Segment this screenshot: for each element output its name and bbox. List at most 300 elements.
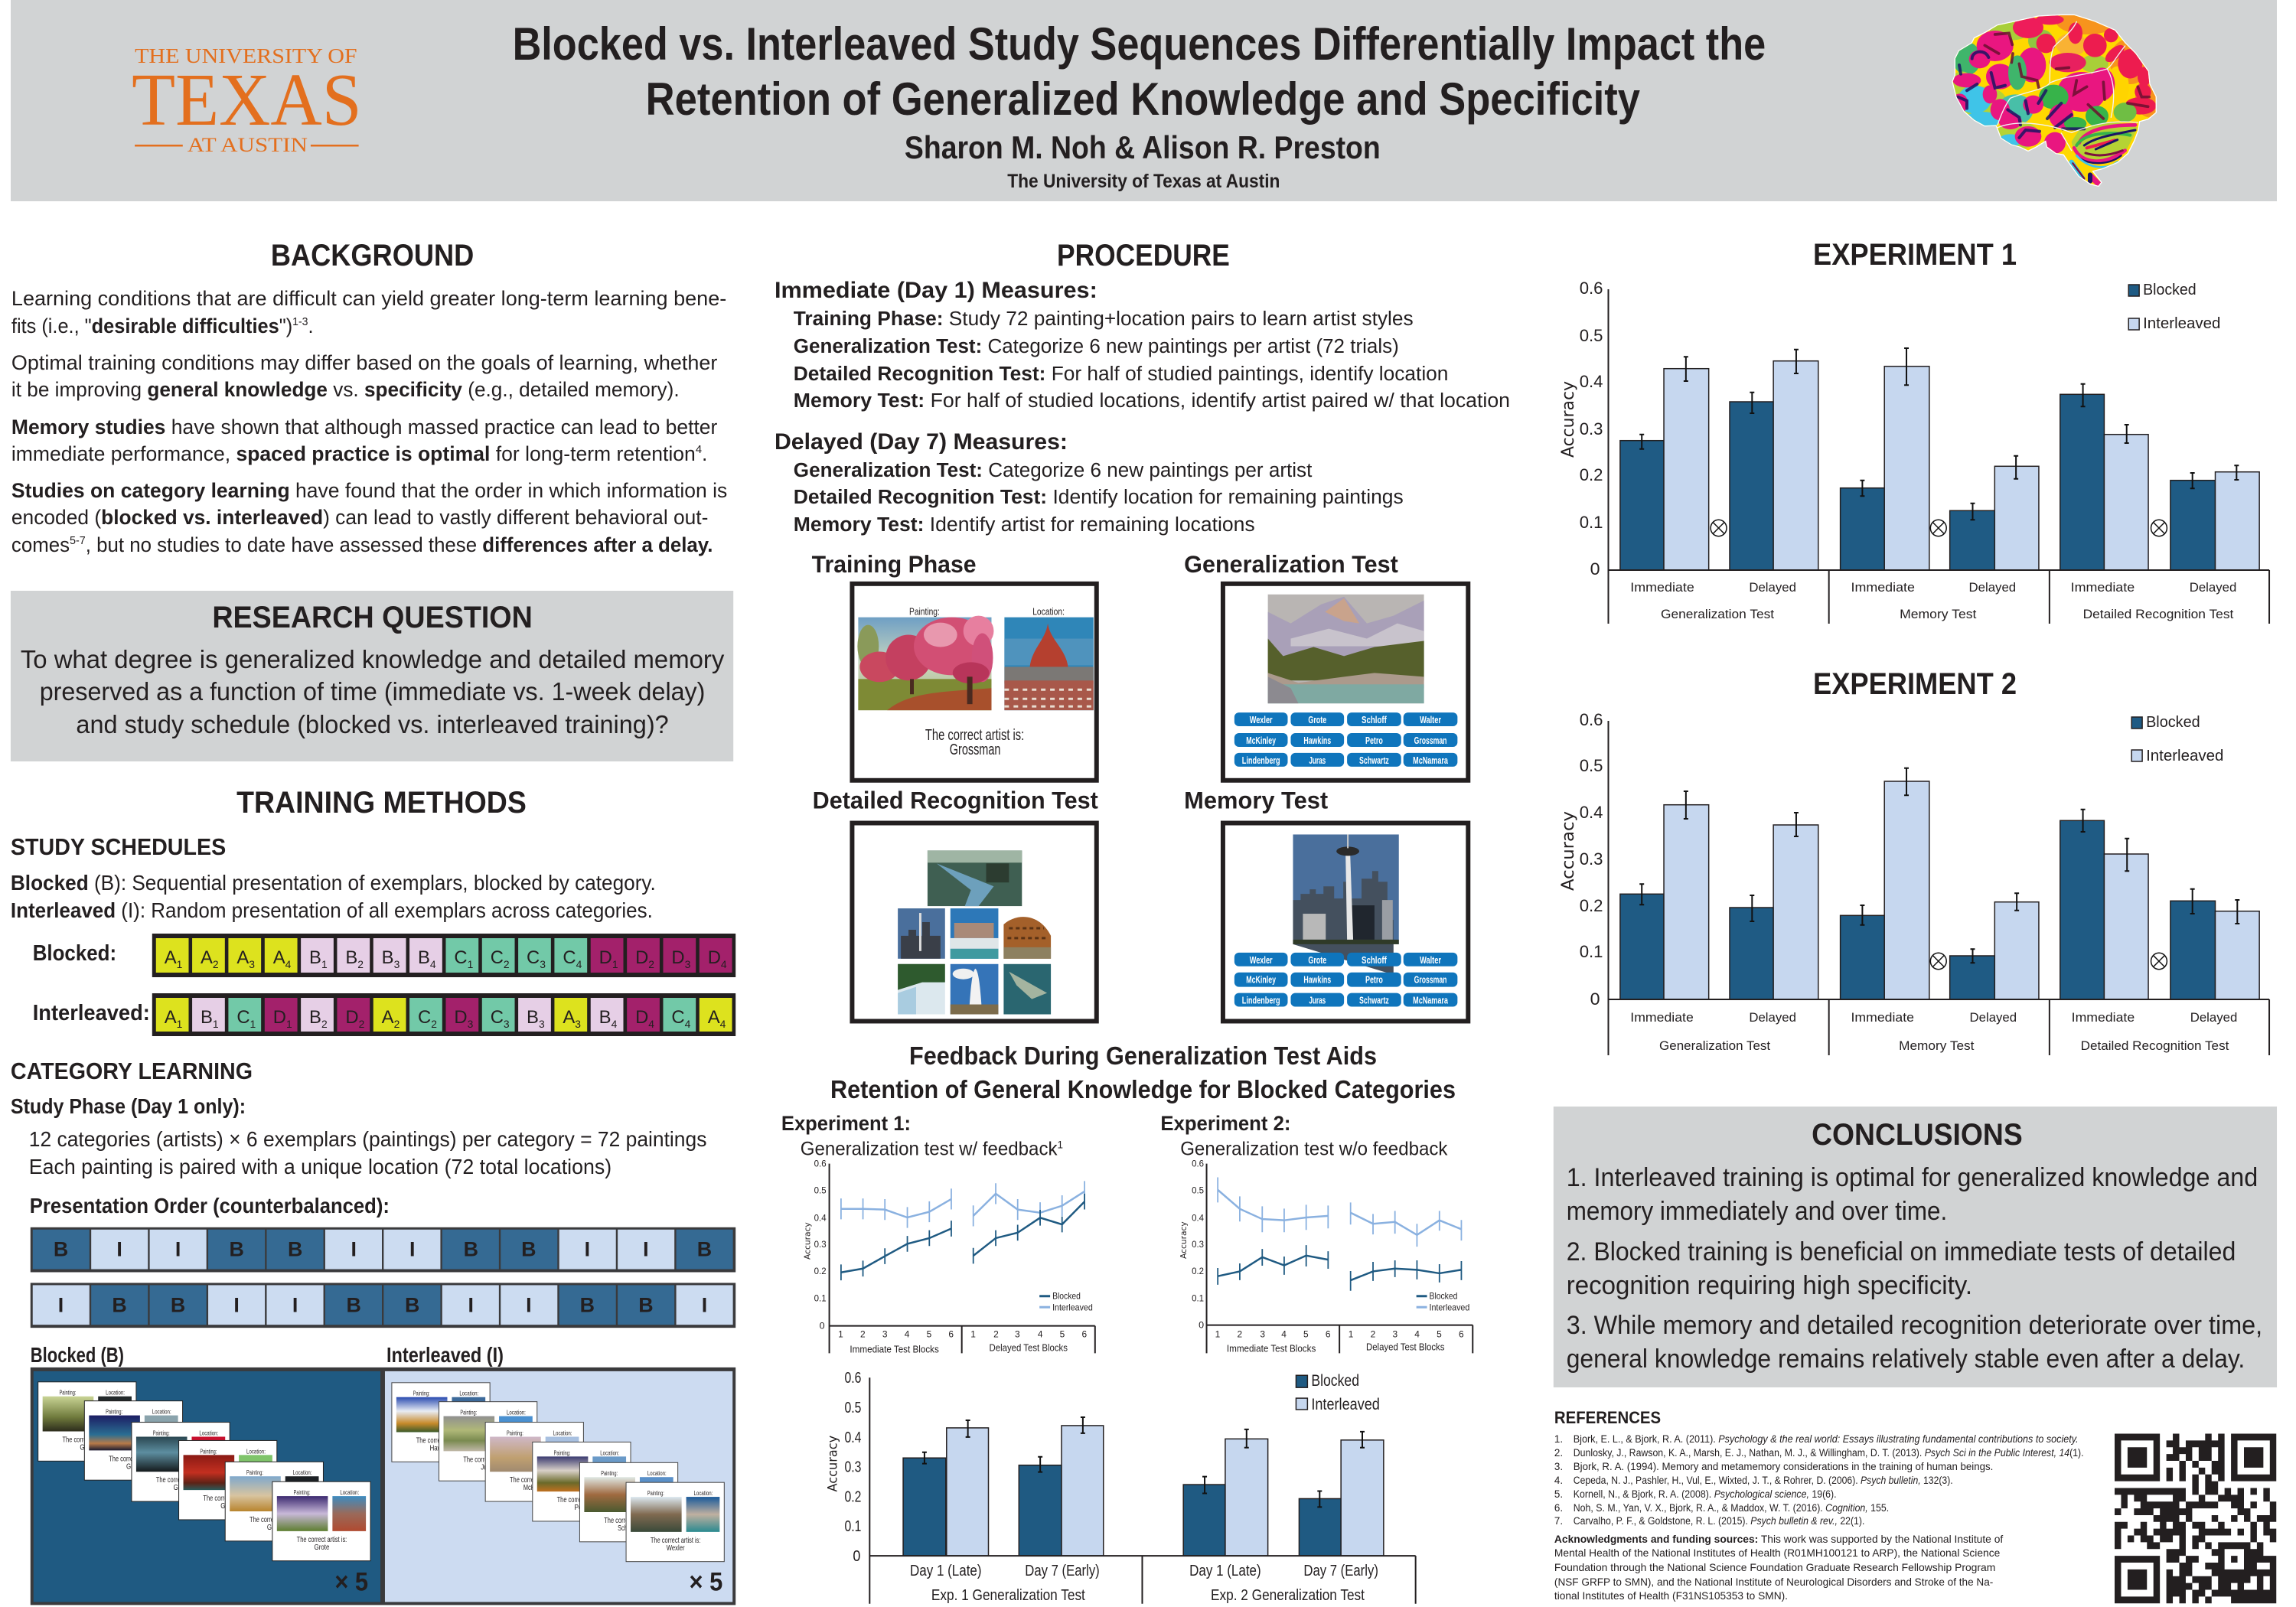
card 5: The correct artist is: bbox=[604, 1517, 654, 1525]
presentation order strip 1: I bbox=[409, 1238, 415, 1261]
line chart: experiment 1 generalization by block: 0.4 bbox=[814, 1212, 827, 1223]
presentation order strip 1 bbox=[31, 1227, 735, 1273]
text block: delayed measures: Delayed (Day 7) Measures: bbox=[775, 429, 1068, 455]
artist response buttons: Walter bbox=[1420, 954, 1441, 966]
reference list: 5. bbox=[1554, 1488, 1563, 1500]
heading: feedback finding: Retention of General Knowledge for Blocked Categories bbox=[830, 1075, 1456, 1103]
interleaved sequence strip: 2 bbox=[321, 1018, 328, 1030]
bar chart: experiment 2: 0.5 bbox=[1580, 756, 1603, 775]
blocked sequence strip: C bbox=[454, 947, 468, 968]
legend bbox=[2128, 282, 2220, 332]
card 4: Painting: bbox=[554, 1449, 571, 1456]
label: training phase: Training Phase bbox=[812, 550, 977, 578]
bar chart: experiment 2: Delayed bbox=[1749, 1010, 1796, 1025]
conclusion statements bbox=[1567, 1163, 2262, 1374]
line chart: experiment 2 generalization by block: 6 bbox=[1326, 1329, 1331, 1340]
card 4 bbox=[533, 1442, 631, 1521]
card 5: Schwartz bbox=[618, 1524, 641, 1533]
text block: background: , but no studies to date have assessed these bbox=[86, 533, 482, 556]
affiliation: The University of Texas at Austin bbox=[1007, 171, 1280, 192]
interleaved sequence strip: D bbox=[454, 1007, 468, 1028]
heading: feedback finding: Feedback During Generalization Test Aids bbox=[909, 1041, 1377, 1070]
panel: training phase screen: Painting: bbox=[909, 606, 940, 618]
interleaved sequence strip: D bbox=[345, 1007, 359, 1028]
card 3: Painting: bbox=[153, 1429, 170, 1436]
card 3: Painting: bbox=[507, 1429, 523, 1436]
legend bbox=[1417, 1291, 1469, 1313]
interleaved sequence strip: 3 bbox=[468, 1018, 474, 1030]
text block: immediate measures: Memory Test: For half of studied locations, identify artist paired w/ that location bbox=[794, 390, 1510, 412]
bar chart: generalization test day 1 vs day 7 bbox=[825, 1370, 1416, 1604]
card 6: The correct artist is: bbox=[651, 1537, 700, 1545]
heading: experiment 1: EXPERIMENT 1 bbox=[1813, 238, 2017, 272]
panel: generalization test screen bbox=[1223, 584, 1468, 781]
text block: background: . bbox=[308, 315, 314, 337]
study phase text: 12 categories (artists) × 6 exemplars (paintings) per category = 72 paintings bbox=[29, 1127, 706, 1151]
image: cathedral location bbox=[1004, 618, 1094, 710]
card 1: Location: bbox=[459, 1390, 478, 1397]
presentation order strip 2: B bbox=[171, 1293, 185, 1316]
line chart: experiment 1 generalization by block: 2 bbox=[860, 1329, 866, 1340]
line chart: experiment 2 generalization by block: 2 bbox=[1238, 1329, 1243, 1340]
bar chart: experiment 1: 0 bbox=[1590, 559, 1600, 579]
panel frame: card sequences bbox=[31, 1367, 735, 1605]
logo: University of Texas at Austin: THE UNIVERSITY OF bbox=[135, 44, 357, 67]
bar chart: experiment 1 bbox=[1559, 279, 2269, 624]
interleaved sequence strip: C bbox=[418, 1007, 431, 1028]
card 6: Wexler bbox=[667, 1544, 685, 1553]
panel: training phase screen: The correct artist is: bbox=[925, 727, 1024, 744]
reference list: 6. bbox=[1554, 1502, 1563, 1514]
interleaved sequence strip: 2 bbox=[431, 1018, 437, 1030]
bar chart: experiment 2: Accuracy bbox=[1559, 811, 1578, 891]
line chart: experiment 2 generalization by block: 4 bbox=[1414, 1329, 1420, 1340]
interleaved sequence strip: 4 bbox=[720, 1018, 726, 1030]
card 6 bbox=[626, 1482, 724, 1562]
legend bbox=[2131, 714, 2223, 764]
card 3: Location: bbox=[199, 1429, 218, 1436]
artist response buttons: Grote bbox=[1308, 714, 1326, 725]
card 5: Painting: bbox=[601, 1470, 618, 1477]
significance markers bbox=[1711, 520, 2167, 536]
line chart: experiment 2 generalization by block: 1 bbox=[1215, 1329, 1221, 1340]
artist response buttons: Wexler bbox=[1250, 954, 1273, 966]
artist response buttons: Lindenberg bbox=[1242, 995, 1280, 1006]
line chart: experiment 1 generalization by block: 5 bbox=[927, 1329, 932, 1340]
bar chart: experiment 2: Immediate bbox=[1851, 1010, 1914, 1025]
logo: University of Texas at Austin: TEXAS bbox=[132, 59, 362, 142]
text block: background: 1-3 bbox=[292, 315, 308, 328]
panel: research question bbox=[11, 591, 733, 761]
line chart: experiment 2 generalization by block: 3 bbox=[1392, 1329, 1397, 1340]
line chart: experiment 2 generalization by block: 0.4 bbox=[1192, 1212, 1204, 1223]
label: presentation order: Presentation Order (counterbalanced): bbox=[30, 1194, 390, 1217]
reference list: Bjork, R. A. (1994). Memory and metamemory considerations in the training of human beings. bbox=[1574, 1461, 1993, 1472]
blocked sequence strip: D bbox=[671, 947, 685, 968]
presentation order strip 1: I bbox=[585, 1238, 590, 1261]
interleaved sequence strip: D bbox=[273, 1007, 286, 1028]
line chart: experiment 1 generalization by block: Delayed Test Blocks bbox=[990, 1341, 1068, 1353]
blocked sequence strip: 1 bbox=[612, 958, 618, 970]
line chart: experiment 1 generalization by block: 4 bbox=[1038, 1329, 1043, 1340]
blocked sequence strip: B bbox=[418, 947, 430, 968]
text block: background: fits (i.e., "desirable difficulties") bbox=[11, 315, 293, 337]
title bbox=[513, 18, 1766, 125]
bar chart: experiment 2: Generalization Test bbox=[1659, 1038, 1770, 1053]
bar chart: generalization test day 1 vs day 7: 0.5 bbox=[844, 1400, 861, 1416]
label: experiment 2 feedback bbox=[1160, 1112, 1448, 1160]
card 5: Painting: bbox=[246, 1469, 263, 1476]
line chart: experiment 2 generalization by block bbox=[1179, 1159, 1473, 1354]
line chart: experiment 1 generalization by block: 6 bbox=[948, 1329, 954, 1340]
artist response buttons: McKinley bbox=[1246, 735, 1277, 746]
heading: training methods: TRAINING METHODS bbox=[236, 786, 527, 820]
label: experiment 1 feedback: 1 bbox=[1058, 1139, 1063, 1151]
line chart: experiment 1 generalization by block: 5 bbox=[1060, 1329, 1065, 1340]
line chart: experiment 1 generalization by block: 0 bbox=[820, 1321, 825, 1332]
text block: background: immediate performance, spaced practice is optimal for long-term retention bbox=[11, 442, 698, 465]
panel: training phase screen: Location: bbox=[1032, 606, 1065, 618]
bar chart: experiment 2: 0.3 bbox=[1580, 849, 1603, 869]
legend bbox=[1039, 1291, 1093, 1313]
bar chart: generalization test day 1 vs day 7: Exp. 2 Generalization Test bbox=[1211, 1587, 1365, 1604]
card 1: Grote bbox=[80, 1443, 96, 1452]
blocked sequence strip: A bbox=[273, 947, 285, 968]
bar chart: generalization test day 1 vs day 7: Day 7 (Early) bbox=[1303, 1563, 1378, 1579]
card 1: Location: bbox=[106, 1390, 125, 1397]
card 6: Grote bbox=[315, 1543, 330, 1552]
bar chart: experiment 1: Delayed bbox=[2190, 580, 2236, 595]
acknowledgments: Mental Health of the National Institutes of Health (R01MH100121 to ARP), the National Science bbox=[1554, 1547, 2000, 1559]
acknowledgments: Acknowledgments and funding sources: This work was supported by the National Institute of bbox=[1554, 1533, 2003, 1545]
presentation order strip 1: I bbox=[351, 1238, 357, 1261]
card 2: Location: bbox=[507, 1410, 526, 1416]
label: experiment 2 feedback: Experiment 2: bbox=[1160, 1112, 1290, 1135]
card 4 bbox=[179, 1440, 277, 1520]
card 2: Grote bbox=[126, 1462, 142, 1471]
presentation order strip 2: B bbox=[112, 1293, 127, 1316]
header banner bbox=[11, 0, 2277, 201]
presentation order strip 1: B bbox=[229, 1238, 244, 1261]
bar chart: experiment 1: Detailed Recognition Test bbox=[2083, 607, 2234, 621]
study phase text bbox=[11, 1094, 706, 1178]
bar chart: experiment 2: 0.2 bbox=[1580, 896, 1603, 915]
blocked sequence strip: 4 bbox=[721, 958, 727, 970]
line chart: experiment 2 generalization by block: 4 bbox=[1281, 1329, 1287, 1340]
label: experiment 2 feedback: Generalization test w/o feedback bbox=[1180, 1139, 1448, 1160]
text block: background: Studies on category learning have found that the order in which information is bbox=[11, 479, 727, 502]
bar chart: generalization test day 1 vs day 7: 0.3 bbox=[844, 1459, 861, 1476]
line chart: experiment 2 generalization by block: 3 bbox=[1260, 1329, 1265, 1340]
artist response buttons: Petro bbox=[1365, 735, 1383, 746]
subheading: category learning: CATEGORY LEARNING bbox=[11, 1058, 253, 1084]
panel: blocked card stack bbox=[34, 1371, 380, 1602]
artist response buttons: Petro bbox=[1365, 974, 1383, 986]
card 2: Painting: bbox=[460, 1410, 477, 1416]
artist response buttons: Grossman bbox=[1414, 735, 1446, 746]
line chart: experiment 1 generalization by block: 0.2 bbox=[814, 1266, 827, 1276]
text block: delayed measures bbox=[775, 429, 1404, 536]
line chart: experiment 2 generalization by block: Delayed Test Blocks bbox=[1366, 1341, 1444, 1352]
text block: background bbox=[11, 287, 727, 556]
conclusion statements: 1. Interleaved training is optimal for generalized knowledge and bbox=[1567, 1163, 2258, 1192]
text block: immediate measures: Detailed Recognition Test: For half of studied paintings, identify location bbox=[794, 363, 1448, 385]
text block: delayed measures: Generalization Test: Categorize 6 new paintings per artist bbox=[794, 460, 1313, 481]
line chart: experiment 2 generalization by block: 0.6 bbox=[1192, 1159, 1204, 1169]
heading: research question: RESEARCH QUESTION bbox=[212, 601, 533, 634]
bar chart: generalization test day 1 vs day 7: 0.4 bbox=[844, 1429, 861, 1446]
legend: Interleaved bbox=[1430, 1302, 1469, 1313]
line chart: experiment 2 generalization by block: 5 bbox=[1303, 1329, 1309, 1340]
text block: background: Memory studies have shown that although massed practice can lead to better bbox=[11, 416, 717, 438]
artist response buttons: Juras bbox=[1309, 995, 1326, 1006]
interleaved sequence strip: A bbox=[563, 1007, 575, 1028]
card 3 bbox=[485, 1423, 583, 1501]
card 1: Hawkins bbox=[430, 1444, 452, 1452]
artist response buttons: Lindenberg bbox=[1242, 755, 1280, 766]
heading: references: REFERENCES bbox=[1554, 1408, 1661, 1427]
bar chart: experiment 1: 0.6 bbox=[1580, 279, 1603, 298]
image thumbnails: location choices bbox=[898, 908, 1051, 1015]
conclusion statements: memory immediately and over time. bbox=[1567, 1197, 1947, 1226]
label: times five: × 5 bbox=[334, 1567, 368, 1597]
line chart: experiment 1 generalization by block: 2 bbox=[993, 1329, 999, 1340]
card 3: Grote bbox=[174, 1484, 189, 1492]
blocked sequence strip: D bbox=[599, 947, 612, 968]
artist response buttons: McKinley bbox=[1246, 974, 1277, 986]
card 5 bbox=[225, 1462, 323, 1541]
image: river painting bbox=[928, 850, 1022, 906]
text block: background: Learning conditions that are difficult can yield greater long-term learning bene- bbox=[11, 287, 726, 310]
interleaved sequence strip: A bbox=[382, 1007, 394, 1028]
line chart: experiment 1 generalization by block: 6 bbox=[1082, 1329, 1088, 1340]
card 6 bbox=[272, 1482, 370, 1561]
card 6: Painting: bbox=[647, 1490, 664, 1497]
line chart: experiment 2 generalization by block: 0 bbox=[1199, 1320, 1204, 1331]
line chart: experiment 2 generalization by block: 1 bbox=[1349, 1329, 1354, 1340]
line chart: experiment 1 generalization by block: 3 bbox=[1015, 1329, 1020, 1340]
research question text: preserved as a function of time (immediate vs. 1-week delay) bbox=[40, 677, 705, 706]
blocked sequence strip: 1 bbox=[468, 958, 474, 970]
presentation order strip 2: B bbox=[405, 1293, 419, 1316]
conclusion statements: 3. While memory and detailed recognition deteriorate over time, bbox=[1567, 1311, 2262, 1340]
card 4: Petro bbox=[574, 1504, 590, 1512]
card 6: Location: bbox=[340, 1489, 359, 1496]
labels: blocked and interleaved card panels bbox=[31, 1343, 504, 1367]
line chart: experiment 1 generalization by block: Immediate Test Blocks bbox=[850, 1343, 939, 1354]
legend: Blocked bbox=[2146, 714, 2200, 731]
presentation order strip 1: B bbox=[54, 1238, 68, 1261]
card 5: Grote bbox=[267, 1524, 282, 1532]
blocked sequence strip: D bbox=[708, 947, 721, 968]
interleaved sequence strip: B bbox=[201, 1007, 213, 1028]
QR code bbox=[2115, 1434, 2276, 1603]
image: blossom painting bbox=[857, 616, 993, 710]
card 1 bbox=[38, 1382, 136, 1461]
blocked sequence strip: A bbox=[236, 947, 249, 968]
interleaved sequence strip: C bbox=[236, 1007, 250, 1028]
labels: blocked and interleaved card panels: Interleaved (I) bbox=[386, 1343, 504, 1367]
bar chart: generalization test day 1 vs day 7: 0.6 bbox=[844, 1370, 861, 1387]
interleaved sequence strip: 4 bbox=[612, 1018, 618, 1030]
blocked sequence strip: 2 bbox=[648, 958, 654, 970]
artist response buttons: McNamara bbox=[1413, 755, 1448, 766]
card 4: Location: bbox=[246, 1448, 266, 1455]
card 4: Grote bbox=[220, 1502, 236, 1511]
conclusion statements: recognition requiring high specificity. bbox=[1567, 1271, 1972, 1300]
bar chart: experiment 2: Delayed bbox=[2190, 1010, 2237, 1025]
line chart: experiment 2 generalization by block: 2 bbox=[1371, 1329, 1376, 1340]
blocked sequence strip: D bbox=[635, 947, 648, 968]
card 3: The correct artist is: bbox=[510, 1476, 560, 1485]
legend: Blocked bbox=[1052, 1291, 1081, 1302]
blocked sequence strip: C bbox=[491, 947, 504, 968]
cerebellum stripes bbox=[1958, 21, 2149, 184]
bar chart: experiment 1: Delayed bbox=[1749, 580, 1796, 595]
legend: Interleaved bbox=[1052, 1302, 1093, 1313]
label: times five: × 5 bbox=[690, 1567, 722, 1597]
bar chart: experiment 2: 0.4 bbox=[1580, 803, 1603, 822]
interleaved sequence strip: 4 bbox=[648, 1018, 654, 1030]
label: experiment 1 feedback: Experiment 1: bbox=[781, 1112, 911, 1135]
line chart: experiment 1 generalization by block: 0.6 bbox=[814, 1159, 827, 1169]
study phase text: Study Phase (Day 1 only): bbox=[11, 1094, 246, 1118]
reference list: Kornell, N., & Bjork, R. A. (2008). Psychological science, 19(6). bbox=[1574, 1488, 1837, 1500]
blocked sequence strip: B bbox=[309, 947, 321, 968]
presentation order strip 2: B bbox=[580, 1293, 595, 1316]
reference list bbox=[1554, 1433, 2084, 1527]
panel: training phase screen bbox=[852, 584, 1097, 781]
blocked sequence strip: 1 bbox=[321, 958, 328, 970]
heading: conclusions: CONCLUSIONS bbox=[1812, 1118, 2023, 1152]
significance markers bbox=[1930, 953, 2167, 970]
blocked sequence strip: 1 bbox=[177, 958, 183, 970]
card 2: Location: bbox=[152, 1409, 171, 1416]
line chart: experiment 1 generalization by block: 0.5 bbox=[814, 1185, 827, 1195]
artist response buttons bbox=[1234, 953, 1457, 1007]
presentation order strip 2: I bbox=[468, 1293, 474, 1316]
presentation order strip 1: B bbox=[288, 1238, 302, 1261]
bar chart: generalization test day 1 vs day 7: Exp. 1 Generalization Test bbox=[931, 1587, 1085, 1604]
blocked sequence strip: A bbox=[201, 947, 213, 968]
acknowledgments: Foundation through the National Science Foundation Graduate Research Fellowship Program bbox=[1554, 1561, 1995, 1573]
acknowledgments: (NSF GRFP to SMN), and the National Institute of Neurological Disorders and Stroke of the Na- bbox=[1554, 1576, 1994, 1588]
interleaved sequence strip: D bbox=[635, 1007, 648, 1028]
line chart: experiment 1 generalization by block: 1 bbox=[970, 1329, 976, 1340]
line chart: experiment 1 generalization by block: 0.3 bbox=[814, 1239, 827, 1250]
card 5: Location: bbox=[293, 1469, 312, 1476]
panel: memory test screen bbox=[1223, 823, 1468, 1021]
study phase text: Each painting is paired with a unique location (72 total locations) bbox=[29, 1155, 612, 1178]
reference list: 2. bbox=[1554, 1447, 1563, 1459]
card 6: The correct artist is: bbox=[297, 1536, 347, 1544]
label: memory test: Memory Test bbox=[1184, 787, 1329, 814]
line chart: experiment 1 generalization by block: 4 bbox=[905, 1329, 910, 1340]
card 1: Painting: bbox=[60, 1390, 76, 1397]
legend: Blocked bbox=[1311, 1372, 1359, 1390]
bar chart: experiment 1: 0.3 bbox=[1580, 419, 1603, 438]
text block: background: . bbox=[702, 442, 707, 465]
card 5 bbox=[579, 1462, 678, 1542]
presentation order strip 1: B bbox=[521, 1238, 536, 1261]
card 2 bbox=[84, 1401, 183, 1480]
text block: background: differences after a delay. bbox=[482, 533, 713, 556]
interleaved sequence strip: 3 bbox=[539, 1018, 545, 1030]
heading: feedback finding bbox=[830, 1041, 1456, 1103]
line chart: experiment 2 generalization by block: 0.3 bbox=[1192, 1239, 1204, 1250]
text block: immediate measures bbox=[775, 278, 1510, 412]
bar chart: generalization test day 1 vs day 7: 0.2 bbox=[844, 1488, 861, 1505]
artist response buttons: Walter bbox=[1420, 714, 1441, 725]
blocked sequence strip: 2 bbox=[357, 958, 364, 970]
interleaved sequence strip: 1 bbox=[177, 1018, 183, 1030]
label: experiment 1 feedback bbox=[781, 1112, 1063, 1160]
card 1: The correct artist is: bbox=[63, 1436, 113, 1444]
interleaved sequence strip: 2 bbox=[359, 1018, 365, 1030]
card 3: The correct artist is: bbox=[156, 1476, 206, 1485]
label: detailed recognition test: Detailed Recognition Test bbox=[813, 787, 1098, 814]
blocked sequence strip: 4 bbox=[576, 958, 582, 970]
blocked sequence strip: C bbox=[527, 947, 540, 968]
card 1: The correct artist is: bbox=[416, 1436, 466, 1445]
card 6: Location: bbox=[694, 1490, 713, 1497]
bar chart: experiment 1: Immediate bbox=[2071, 580, 2135, 595]
bar chart: experiment 2: Detailed Recognition Test bbox=[2081, 1038, 2229, 1053]
conclusion statements: general knowledge remains relatively stable even after a delay. bbox=[1567, 1345, 2245, 1374]
bar chart: experiment 1: 0.4 bbox=[1580, 372, 1603, 391]
interleaved sequence strip: A bbox=[165, 1007, 177, 1028]
line chart: experiment 1 generalization by block: 3 bbox=[882, 1329, 888, 1340]
blocked sequence strip: B bbox=[345, 947, 357, 968]
card 3 bbox=[132, 1423, 230, 1501]
artist response buttons bbox=[1234, 712, 1457, 767]
card 5: The correct artist is: bbox=[249, 1516, 300, 1524]
reference list: 7. bbox=[1554, 1515, 1563, 1527]
line chart: experiment 2 generalization by block: 6 bbox=[1459, 1329, 1464, 1340]
card 2: Painting: bbox=[106, 1409, 122, 1416]
bar chart: generalization test day 1 vs day 7: Day 1 (Late) bbox=[1189, 1563, 1261, 1579]
reference list: Bjork, E. L., & Bjork, R. A. (2011). Psychology & the real world: Essays illustrating fundamental contributions to society. bbox=[1574, 1433, 2079, 1445]
presentation order strip 1: I bbox=[643, 1238, 649, 1261]
interleaved sequence strip: 3 bbox=[575, 1018, 581, 1030]
blocked sequence strip: C bbox=[563, 947, 576, 968]
text block: background: it be improving general knowledge vs. specificity (e.g., detailed memory). bbox=[11, 378, 680, 401]
interleaved sequence strip: 2 bbox=[394, 1018, 400, 1030]
blocked sequence strip: 3 bbox=[249, 958, 255, 970]
artist response buttons: Juras bbox=[1309, 755, 1326, 766]
bar chart: generalization test day 1 vs day 7: Day 1 (Late) bbox=[910, 1563, 982, 1579]
reference list: Cepeda, N. J., Pashler, H., Vul, E., Wixted, J. T., & Rohrer, D. (2006). Psych bulletin, 132(3). bbox=[1574, 1475, 1953, 1486]
text block: background: comes bbox=[11, 533, 72, 556]
interleaved sequence strip: 3 bbox=[504, 1018, 510, 1030]
line chart: experiment 2 generalization by block: 0.5 bbox=[1192, 1185, 1204, 1195]
card 2: Juras bbox=[481, 1463, 496, 1472]
presentation order strip 2: B bbox=[347, 1293, 361, 1316]
labels: blocked and interleaved card panels: Blocked (B) bbox=[31, 1343, 124, 1367]
blocked sequence strip: 3 bbox=[540, 958, 546, 970]
blocked sequence strip: 4 bbox=[285, 958, 292, 970]
blocked sequence strip: Blocked: bbox=[33, 941, 116, 966]
title: Retention of Generalized Knowledge and Specificity bbox=[646, 73, 1640, 125]
bar chart: generalization test day 1 vs day 7: Day 7 (Early) bbox=[1025, 1563, 1100, 1579]
bar chart: experiment 1: Delayed bbox=[1969, 580, 2016, 595]
panel: training phase screen: Grossman bbox=[950, 742, 1000, 758]
bar chart: generalization test day 1 vs day 7: Accuracy bbox=[825, 1436, 840, 1491]
artist response buttons: Schwartz bbox=[1359, 995, 1389, 1006]
research question text bbox=[21, 645, 725, 738]
line chart: experiment 1 generalization by block: Accuracy bbox=[803, 1222, 813, 1260]
acknowledgments: tional Institutes of Health (F31NS105353 to SMN). bbox=[1554, 1589, 1788, 1602]
